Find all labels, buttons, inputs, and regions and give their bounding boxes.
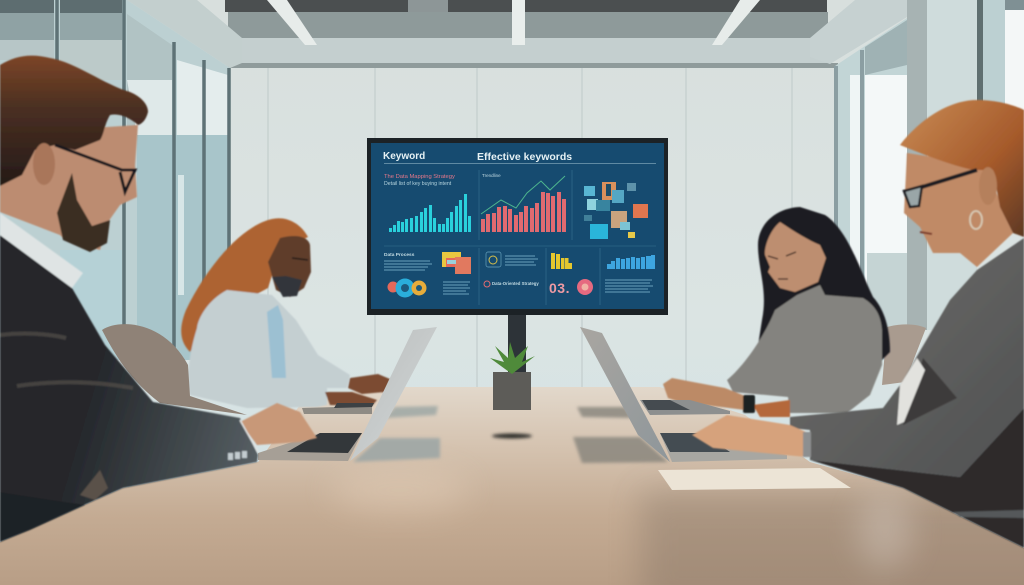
left glass partition [0,0,230,392]
ceiling [127,0,907,68]
bar chart: yellow [551,253,572,269]
chair: back-right [882,324,926,385]
icon: bullet [484,281,490,287]
monitor stand [508,312,526,392]
notepad [658,468,851,490]
text placeholder lines [384,261,432,270]
text placeholder lines [505,256,538,265]
bar chart: blue [607,255,655,269]
right windows [835,0,1024,400]
person: back-right woman [663,207,890,417]
label: data-oriented strategy: Data-Oriented Strategy [492,281,539,286]
line chart: trend [481,176,565,214]
bar chart: coral keyword performance [481,192,566,232]
chair: back-left [102,324,247,415]
person: front-left man [0,56,317,542]
figure: 03: 03. [549,280,570,296]
person: back-left woman [181,218,390,408]
panel label: trend: Trendline [482,173,501,178]
image collage [584,182,648,239]
table [0,387,1024,585]
venn circles [388,278,426,298]
plant [490,342,535,410]
subheading text: The Data Mapping Strategy [384,174,455,180]
icon: gauge tile [486,252,501,267]
person: front-right woman [692,100,1024,548]
bar chart: cyan keyword volume [389,194,471,232]
laptop: back-left [302,403,374,414]
panel label: data process: Data Process [384,252,415,258]
laptop: front-left [258,327,437,461]
divider lines [384,170,656,305]
subheading text: Detail list of key buying intent [384,181,452,187]
heading: effective keywords: Effective keywords [477,151,572,163]
text placeholder lines [443,282,470,294]
laptop: front-right [580,327,787,462]
monitor: keyword dashboard [367,138,668,315]
image tile: chart thumbnail [442,252,471,274]
heading: keyword: Keyword [383,151,425,162]
subheading text [384,174,455,187]
laptop: back-right [640,400,730,415]
text placeholder lines [605,280,653,292]
icon: pink donut [577,279,593,295]
table shadows [353,406,668,463]
